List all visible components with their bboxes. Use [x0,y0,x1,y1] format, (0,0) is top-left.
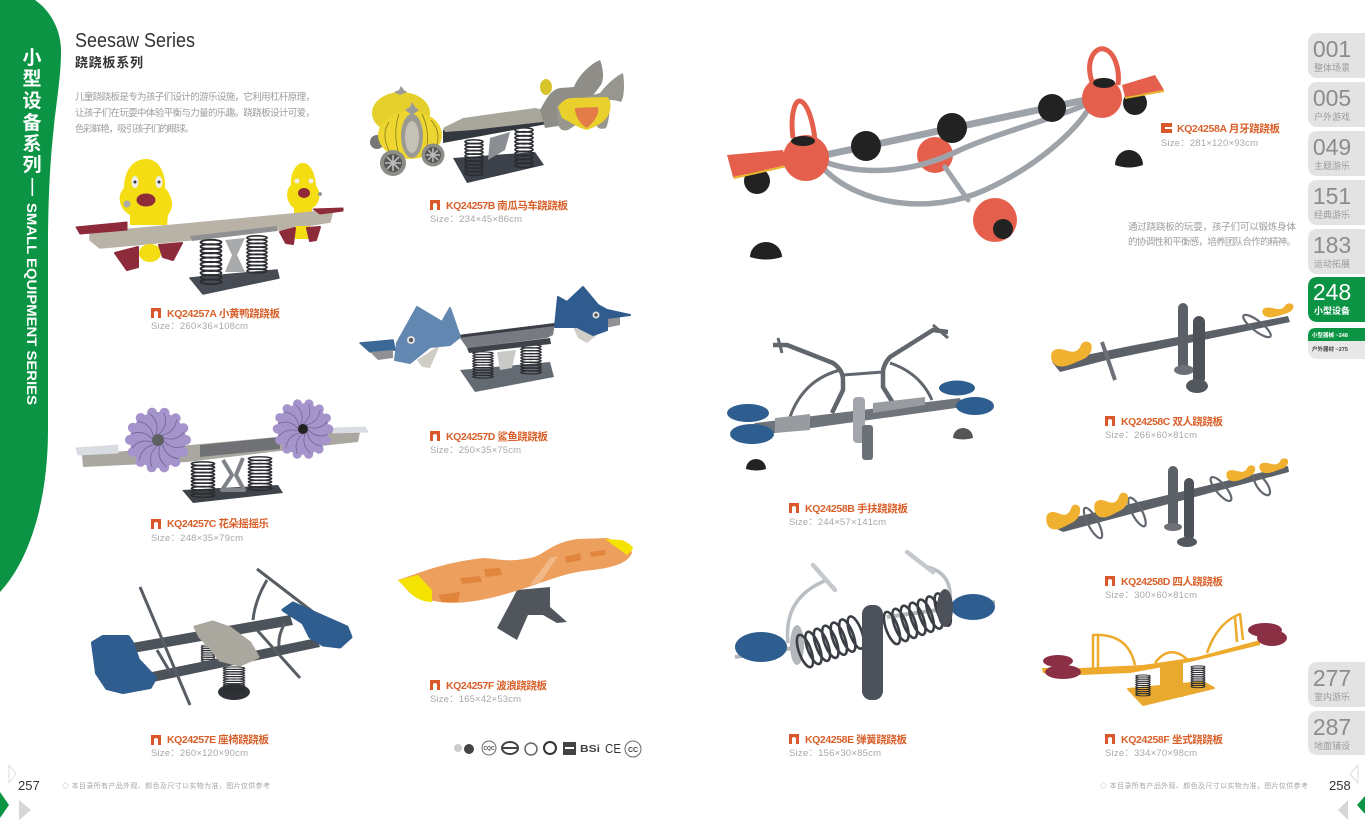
tab 005 [1308,82,1365,127]
caption: Size：281×120×93cm [1161,138,1258,149]
sidebar Chinese title: 列 [22,154,42,176]
sub tab: 户外器材: 户外器材 ~275 [1312,345,1348,353]
caption [430,199,568,225]
caption: KQ24257C 花朵摇摇乐 [167,517,270,530]
caption [1161,122,1280,149]
caption [430,430,548,456]
tab 151: 经典游乐 [1314,209,1350,220]
disclaimer right: ◇ 本目录所有产品外观、颜色及尺寸以实物为准，图片仅供参考 [1100,781,1308,790]
text block: play benefits: 的协调性和平衡感，培养团队合作的精神。 [1128,236,1296,248]
panel: KQ24257B pumpkin carriage seesaw [370,60,624,225]
caption: KQ24258A 月牙跷跷板 [1177,122,1280,135]
sub tab: 小型器械 active: 小型器械 ~248 [1312,331,1348,339]
illustration: wave seesaw [398,538,633,640]
sub tab: 小型器械 active [1308,328,1365,341]
caption [151,733,270,759]
illustration: handle seesaw [727,325,994,470]
heading: Seesaw Series: Seesaw Series [75,30,195,52]
sidebar dash [32,178,33,196]
tab 277: 277 [1313,665,1351,691]
illustration: flower seesaw [76,403,368,503]
caption: Size：244×57×141cm [789,517,886,528]
caption: Size：300×60×81cm [1105,590,1197,601]
illustration: bench seesaw [93,569,351,705]
caption: Size：260×36×108cm [151,321,248,332]
sidebar Chinese title: 系 [22,133,42,155]
tab 248 active [1308,277,1365,322]
caption: Size：260×120×90cm [151,748,248,759]
tab 248 active: 248 [1313,279,1351,305]
caption [789,502,908,528]
illustration: spring seesaw [735,552,995,700]
tab 001: 整体场景 [1314,62,1350,73]
certification logos: CQC [483,746,495,752]
caption: KQ24257E 座椅跷跷板 [167,733,270,746]
caption [151,307,280,332]
caption: Size：156×30×85cm [789,748,881,759]
heading: Chinese subtitle: 跷跷板系列 [75,55,143,70]
sidebar Chinese title: 备 [22,112,42,134]
tab 005: 户外游戏 [1314,111,1350,122]
caption [1105,733,1224,759]
caption: KQ24257A 小黄鸭跷跷板 [167,307,280,320]
intro text block: 儿童跷跷板是专为孩子们设计的游乐设施，它利用杠杆原理， [75,91,315,103]
tab 151: 151 [1313,183,1351,209]
caption [789,733,908,759]
certification logos: CE [605,741,621,756]
caption: KQ24258C 双人跷跷板 [1121,415,1224,428]
certification logos: CC [628,747,638,754]
chapter tabs [1308,33,1365,755]
illustration: shark seesaw [360,287,630,392]
sidebar Chinese title: 小 [22,47,42,69]
panel: KQ24257E bench seesaw [93,569,351,759]
caption: Size：165×42×53cm [430,694,521,705]
tab 049: 主题游乐 [1314,160,1350,171]
tab 001: 001 [1313,36,1351,62]
caption: Size：234×45×86cm [430,214,522,225]
caption: KQ24258D 四人跷跷板 [1121,575,1224,588]
caption: KQ24258B 手扶跷跷板 [805,502,908,515]
tab 277: 室内游乐 [1314,691,1350,702]
text block: play benefits [1128,221,1296,248]
page number 258: 258 [1329,778,1351,793]
certification logos [454,741,641,757]
caption: KQ24257B 南瓜马车跷跷板 [446,199,568,212]
text block: play benefits: 通过跷跷板的玩耍，孩子们可以锻炼身体 [1128,221,1296,233]
illustration: sitting seesaw [1042,614,1287,705]
tab 151 [1308,180,1365,225]
tab 049: 049 [1313,134,1351,160]
tab 049 [1308,131,1365,176]
panel: KQ24258C two-person seesaw [1051,303,1294,441]
certification logos: BSi [580,744,600,755]
caption [430,679,548,705]
tab 248 active: 小型设备 [1314,305,1350,316]
sidebar Chinese title: 型 [22,68,42,90]
tab 183: 运动拓展 [1314,258,1350,269]
left footer [0,765,270,820]
illustration: pumpkin carriage [370,60,624,183]
caption: Size：266×60×81cm [1105,430,1197,441]
panel: KQ24257A duck seesaw [76,159,343,332]
illustration: four-person seesaw [1046,458,1289,547]
panel: KQ24258D four-person seesaw [1046,458,1289,601]
tab 001 [1308,33,1365,78]
illustration: crescent seesaw [727,49,1164,259]
caption [151,517,270,544]
panel: KQ24258A crescent seesaw [727,49,1280,259]
caption [1105,415,1224,441]
tab 005: 005 [1313,85,1351,111]
sidebar Chinese title: 设 [22,90,42,112]
intro text block: 让孩子们在玩耍中体验平衡与力量的乐趣。跷跷板设计可爱， [75,107,315,119]
panel: KQ24257F wave seesaw [398,538,633,705]
left green sidebar [0,0,61,592]
disclaimer left: ◇ 本目录所有产品外观、颜色及尺寸以实物为准，图片仅供参考 [62,781,270,790]
intro text block [75,91,315,135]
panel: KQ24258E spring seesaw [735,552,995,759]
caption: Size：250×35×75cm [430,445,521,456]
panel: KQ24258F sitting seesaw [1042,614,1287,759]
tab 183 [1308,229,1365,274]
caption: KQ24257D 鲨鱼跷跷板 [446,430,548,443]
illustration: duck seesaw [76,159,343,294]
tab 287: 地面铺设 [1314,740,1350,751]
caption: Size：334×70×98cm [1105,748,1197,759]
sub tab: 户外器材 [1308,341,1365,359]
nav arrows right [1338,765,1365,820]
tab 287: 287 [1313,714,1351,740]
panel: KQ24257D shark seesaw [360,287,630,456]
nav arrows left [0,765,31,820]
intro text block: 色彩鲜艳，吸引孩子们的眼球。 [75,123,194,135]
tab 277 [1308,662,1365,707]
tab 287 [1308,711,1365,755]
caption: KQ24258E 弹簧跷跷板 [805,733,908,746]
right footer [1100,765,1365,820]
caption: KQ24257F 波浪跷跷板 [446,679,548,692]
illustration: two-person seesaw [1051,303,1294,393]
caption: Size：248×35×79cm [151,533,243,544]
caption: KQ24258F 坐式跷跷板 [1121,733,1224,746]
page number 257: 257 [18,778,40,793]
sidebar English title: SMALL EQUIPMENT SERIES [24,203,39,405]
sidebar Chinese title [22,47,42,176]
caption [1105,575,1224,601]
tab 183: 183 [1313,232,1351,258]
panel: KQ24257C flower seesaw [76,403,368,544]
panel: KQ24258B handle seesaw [727,325,994,528]
